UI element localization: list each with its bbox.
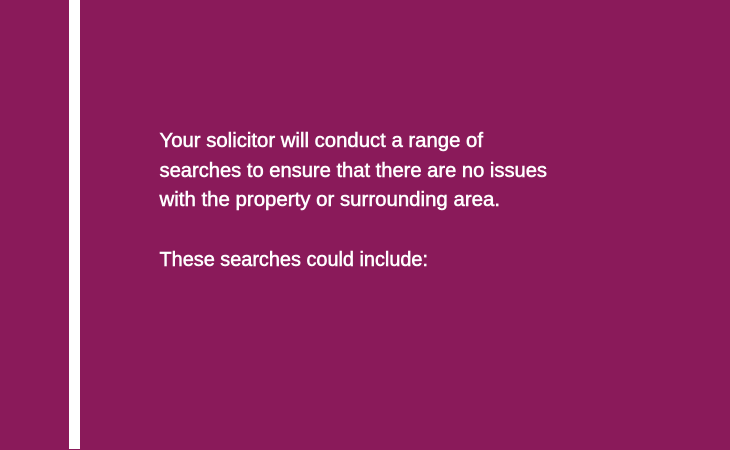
- intro text block: searches to ensure that there are no issues: [160, 160, 547, 182]
- intro text block: [158, 130, 547, 211]
- lead-in text: These searches could include:: [160, 249, 428, 271]
- intro text block: with the property or surrounding area.: [158, 189, 500, 211]
- white vertical bar: [69, 0, 80, 449]
- intro text block: Your solicitor will conduct a range of: [160, 130, 483, 152]
